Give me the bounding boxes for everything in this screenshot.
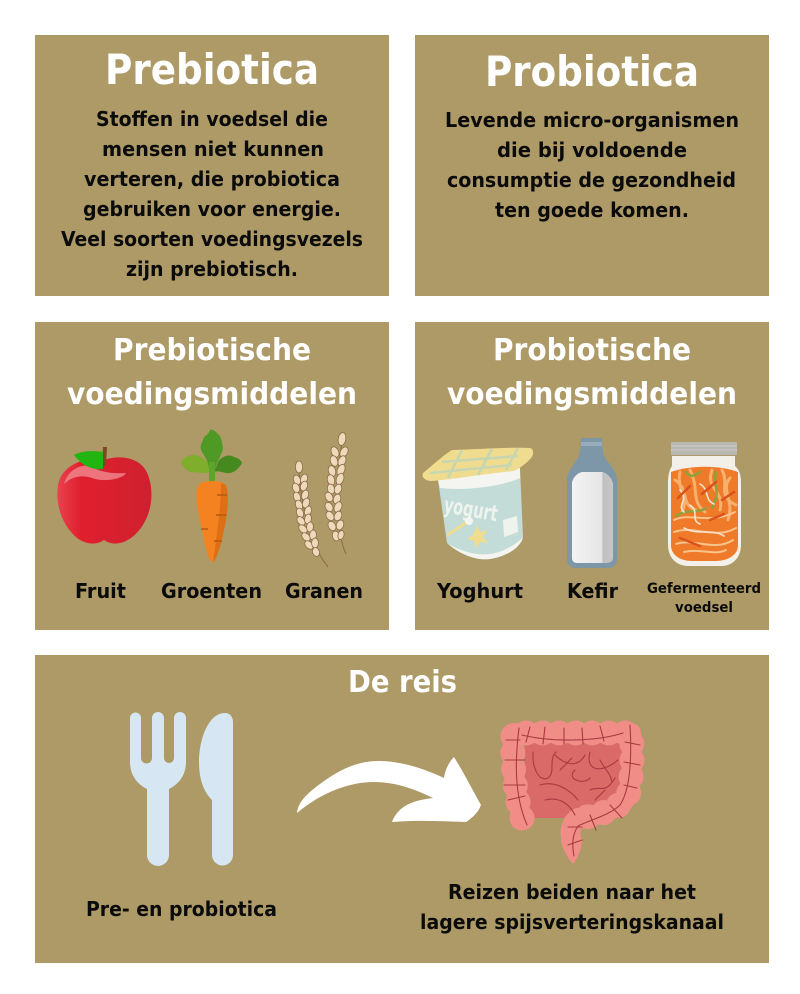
label: Gefermenteerd voedsel	[647, 581, 761, 616]
heading: prebiotische voedingsmiddelen: voedingsmiddelen	[67, 377, 357, 412]
label: Kefir: Kefir	[567, 579, 619, 603]
text block: prebiotica definition: Veel soorten voedingsvezels	[61, 227, 363, 251]
heading: prebiotische voedingsmiddelen: Prebiotische	[113, 333, 311, 368]
text block: probiotica definition: Levende micro-organismen	[445, 108, 739, 132]
icon: carrot	[181, 430, 242, 562]
icon: grains	[291, 432, 350, 567]
text: reizen beiden: lagere spijsverteringskanaal	[420, 910, 724, 934]
heading: probiotische voedingsmiddelen: voedingsmiddelen	[447, 377, 737, 412]
label: Yoghurt: Yoghurt	[436, 579, 523, 603]
panel: de reis	[35, 655, 769, 963]
text block: probiotica definition: ten goede komen.	[495, 198, 689, 222]
heading: Prebiotica: Prebiotica	[105, 45, 319, 94]
label: Gefermenteerd voedsel: voedsel	[675, 600, 733, 616]
text block: probiotica definition	[445, 108, 739, 222]
heading: De reis: De reis	[348, 665, 457, 700]
icon: yoghurt	[422, 448, 533, 559]
heading: Probiotica: Probiotica	[485, 47, 699, 96]
icon: knife	[199, 713, 233, 866]
label: Gefermenteerd voedsel: Gefermenteerd	[647, 581, 761, 597]
text block: probiotica definition: consumptie de gezondheid	[447, 168, 736, 192]
text block: prebiotica definition: verteren, die probiotica	[84, 167, 340, 191]
text block: prebiotica definition: mensen niet kunnen	[102, 137, 324, 161]
panel: prebiotica	[35, 35, 389, 296]
panel: prebiotische voedingsmiddelen	[35, 322, 389, 630]
heading: probiotische voedingsmiddelen: Probiotische	[493, 333, 691, 368]
panel: probiotica	[415, 35, 769, 296]
heading: prebiotische voedingsmiddelen	[67, 333, 357, 412]
heading: probiotische voedingsmiddelen	[447, 333, 737, 412]
text block: prebiotica definition: Stoffen in voedsel die	[96, 107, 328, 131]
label: Groenten: Groenten	[161, 579, 262, 603]
text: reizen beiden	[420, 880, 724, 934]
panel: probiotische voedingsmiddelen	[415, 322, 769, 630]
label: Granen: Granen	[285, 579, 363, 603]
icon: fork	[130, 712, 186, 866]
icon: apple	[57, 447, 151, 544]
arrow	[297, 757, 481, 822]
icon: kefir bottle	[567, 438, 617, 568]
icon: intestines	[504, 725, 640, 864]
icon: fermented food jar	[668, 442, 741, 566]
text block: prebiotica definition	[61, 107, 363, 281]
text: reizen beiden: Reizen beiden naar het	[448, 880, 696, 904]
text block: prebiotica definition: zijn prebiotisch.	[126, 257, 298, 281]
text: Pre- en probiotica: Pre- en probiotica	[86, 897, 277, 921]
label: Fruit: Fruit	[75, 579, 126, 603]
text block: prebiotica definition: gebruiken voor energie.	[83, 197, 341, 221]
product lettering: yogurt	[442, 493, 500, 527]
text block: probiotica definition: die bij voldoende	[497, 138, 687, 162]
